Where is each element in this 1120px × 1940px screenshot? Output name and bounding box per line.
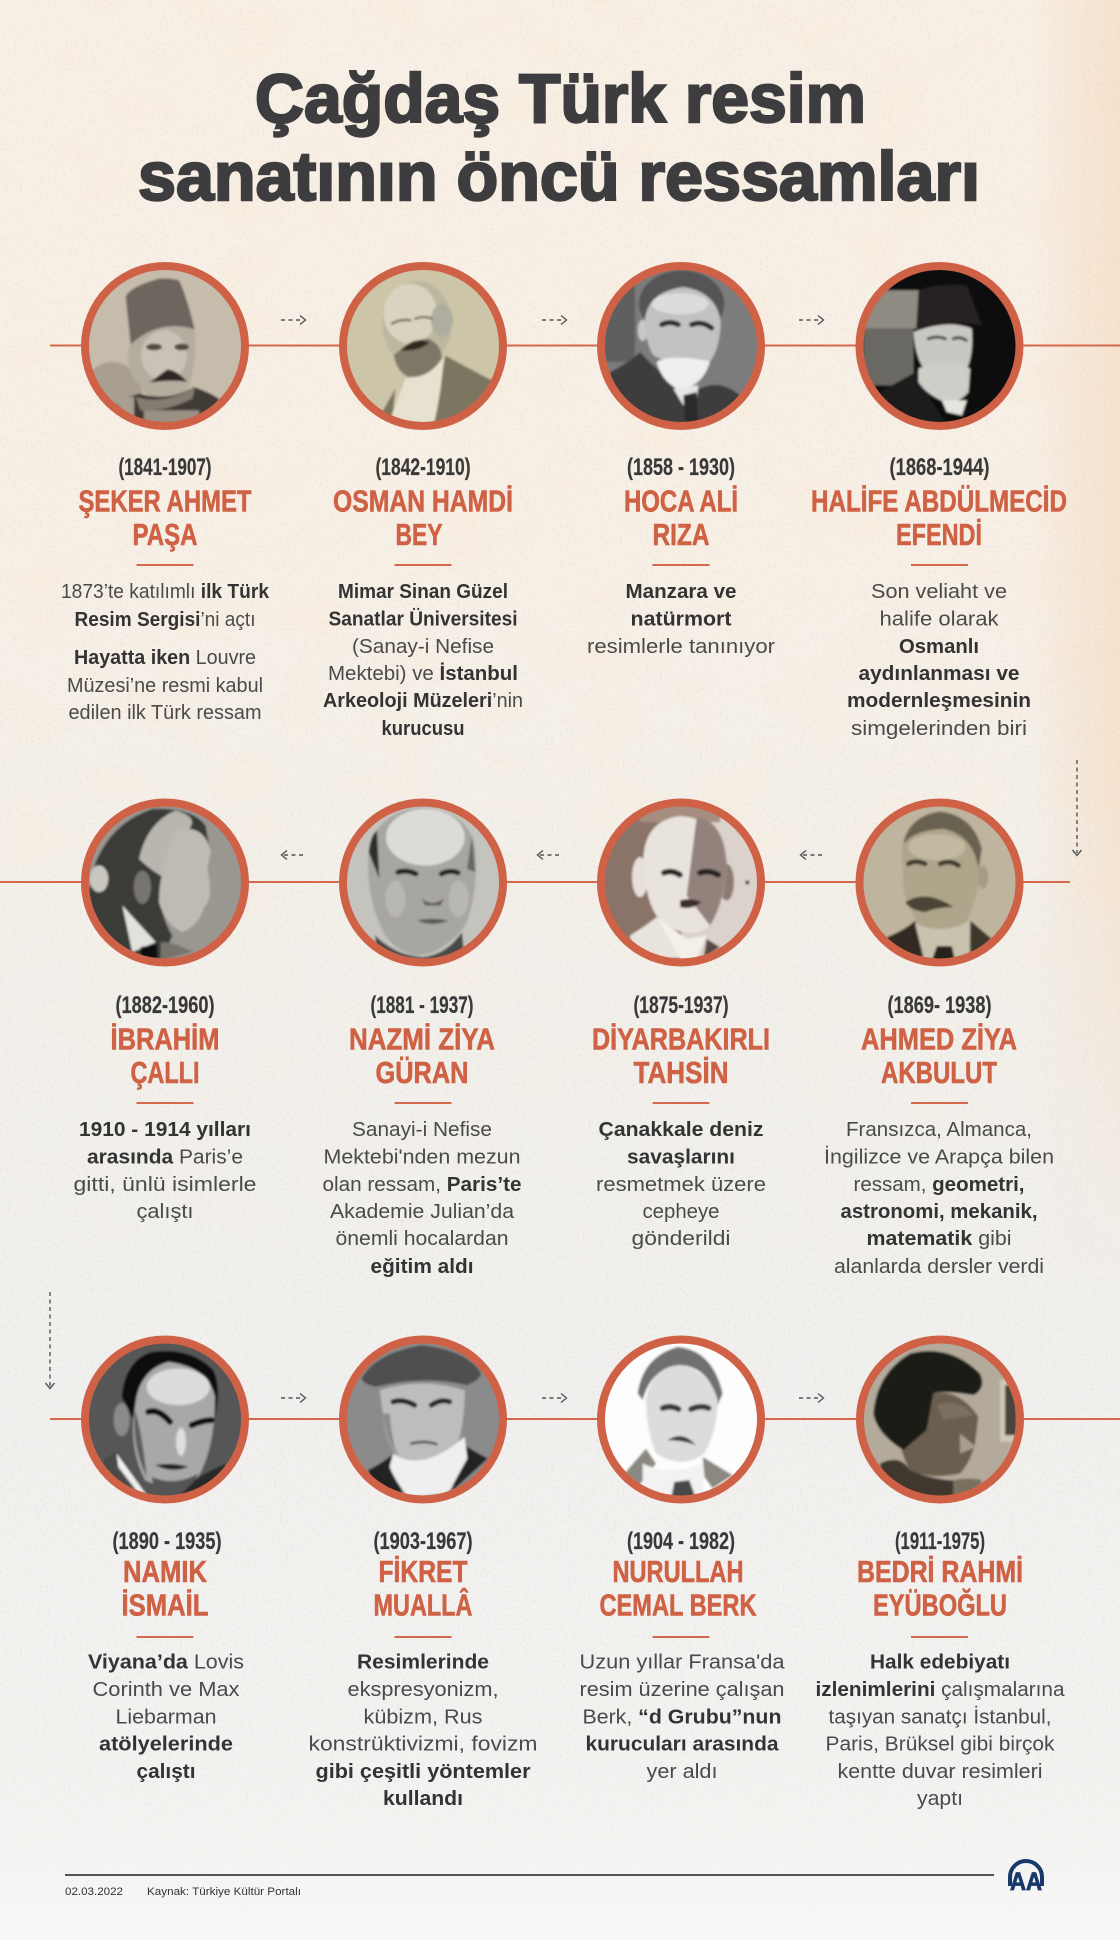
biography: kurucuları arasında [586,1734,779,1756]
biography: resmetmek üzere [596,1174,766,1196]
title: sanatının öncü ressamları [138,138,980,215]
biography: gibi çeşitli yöntemler [316,1761,531,1783]
biography [596,1119,766,1250]
name [600,1554,757,1622]
biography [322,1119,522,1278]
name: RIZA [652,517,710,552]
biography: Berk, “d Grubu”nun [582,1706,782,1728]
biography: konstrüktivizmi, fovizm [308,1734,538,1756]
name: İSMAİL [122,1588,208,1622]
portrait: Namık İsmail [82,1337,248,1503]
biography: atölyelerinde [99,1734,233,1756]
dates: (1903-1967) [374,1528,472,1555]
name: İBRAHİM [110,1022,220,1056]
divider [136,564,194,566]
biography: Müzesi’ne resmi kabul [67,675,263,697]
biography: Akademie Julian’da [330,1201,515,1223]
biography [816,1652,1065,1810]
biography: aydınlanması ve [858,663,1020,685]
biography: 1910 - 1914 yılları [79,1119,251,1141]
dates: (1882-1960) [116,992,214,1019]
biography: Mimar Sinan Güzel [338,581,508,603]
panel: Şeker Ahmet Paşa [61,262,270,724]
name: BEDRİ RAHMİ [857,1554,1023,1589]
biography: kentte duvar resimleri [838,1761,1042,1783]
biography: ressam, geometri, [854,1174,1024,1196]
flow arrows [46,316,1082,1402]
name: AKBULUT [881,1055,997,1090]
name: BEY [396,517,443,552]
dates: (1875-1937) [634,992,728,1019]
biography [587,581,775,658]
dates: (1869- 1938) [888,992,992,1019]
panel: Nurullah Cemal Berk [580,1337,785,1783]
portrait: Osman Hamdi Bey [340,262,507,429]
biography: matematik gibi [866,1228,1012,1250]
biography: izlenimlerini çalışmalarına [816,1679,1065,1701]
dates: (1842-1910) [376,454,470,481]
divider [911,1636,968,1638]
portrait: Nurullah Cemal Berk [598,1337,764,1503]
biography [824,1119,1054,1278]
divider [394,1636,452,1638]
name: TAHSİN [634,1055,728,1090]
biography: Son veliaht ve [871,581,1007,603]
name: CEMAL BERK [600,1588,757,1622]
divider [652,564,710,566]
name [349,1022,495,1090]
biography: Mektebi) ve İstanbul [328,662,518,685]
biography [308,1652,538,1810]
biography: edilen ilk Türk ressam [68,702,262,724]
name: EYÜBOĞLU [873,1588,1007,1622]
name [122,1554,208,1622]
biography [323,581,523,740]
name [333,484,513,552]
biography: eğitim aldı [370,1256,474,1278]
biography: Sanatlar Üniversitesi [328,608,518,630]
name [861,1022,1017,1090]
dates: (1911-1975) [895,1528,985,1555]
biography: olan ressam, Paris’te [322,1174,522,1196]
biography: Liebarman [116,1706,216,1728]
name [857,1554,1023,1622]
biography: modernleşmesinin [847,690,1031,712]
name [110,1022,220,1090]
biography: Corinth ve Max [92,1679,240,1701]
divider [911,564,968,566]
panel: Namık İsmail [82,1337,248,1783]
biography: Fransızca, Almanca, [846,1119,1032,1141]
biography: Hayatta iken Louvre [74,647,256,669]
dates: (1881 - 1937) [370,992,474,1019]
name: HOCA ALİ [624,484,738,518]
dates: (1858 - 1930) [627,454,735,481]
timeline rows [0,346,1120,1419]
biography: resimlerle tanınıyor [587,636,775,658]
biography: yaptı [917,1788,963,1810]
biography [847,581,1031,740]
biography [74,1119,256,1223]
biography: Halk edebiyatı [870,1652,1010,1674]
panel: Bedri Rahmi Eyüboğlu [816,1337,1065,1810]
portrait: Nazmi Ziya Güran [340,799,507,965]
biography: kurucusu [382,718,464,740]
biography: alanlarda dersler verdi [834,1256,1044,1278]
biography [88,1652,244,1783]
biography: Arkeoloji Müzeleri’nin [323,690,523,712]
panel: Nazmi Ziya Güran [322,799,522,1278]
dates: (1890 - 1935) [112,1528,222,1555]
biography [580,1652,785,1783]
biography: 1873’te katılımlı ilk Türk [61,581,270,603]
portrait: Bedri Rahmi Eyüboğlu [857,1337,1023,1503]
dates: (1868-1944) [890,454,990,481]
source: Kaynak: Türkiye Kültür Portalı [147,1886,301,1898]
biography: taşıyan sanatçı İstanbul, [828,1706,1052,1728]
biography: önemli hocalardan [336,1228,508,1250]
biography: Çanakkale deniz [598,1119,764,1141]
biography: çalıştı [136,1201,194,1223]
biography: gönderildi [632,1228,730,1250]
portrait: Fikret Mualla [340,1337,506,1503]
biography: İngilizce ve Arapça bilen [824,1146,1054,1168]
portrait: Hoca Ali Rıza [598,262,765,429]
biography: Viyana’da Lovis [88,1652,244,1674]
dates: (1904 - 1982) [627,1528,735,1555]
panel: Ahmed Ziya Akbulut [824,799,1054,1278]
name: NAMIK [123,1554,207,1589]
biography: ekspresyonizm, [348,1679,498,1701]
portrait: Şeker Ahmet Paşa [82,262,249,429]
biography [61,581,270,724]
divider [652,1102,710,1104]
name: OSMAN HAMDİ [333,484,513,518]
biography: resim üzerine çalışan [580,1679,784,1701]
name: EFENDİ [896,517,982,552]
date: 02.03.2022 [65,1886,123,1898]
divider [911,1102,968,1104]
name: DİYARBAKIRLI [592,1022,770,1056]
name: MUALLÂ [374,1586,472,1622]
name [592,1022,770,1090]
name: NURULLAH [612,1554,744,1589]
biography: halife olarak [880,608,1000,630]
panel: Fikret Mualla [308,1337,538,1810]
biography: simgelerinden biri [851,718,1027,740]
name: ÇALLI [130,1055,200,1090]
biography: kullandı [383,1788,463,1810]
portrait: Ahmed Ziya Akbulut [857,799,1023,965]
biography: gitti, ünlü isimlerle [74,1174,256,1196]
biography: Sanayi-i Nefise [352,1119,492,1141]
divider [136,1102,194,1104]
biography: çalıştı [136,1761,196,1783]
dates: (1841-1907) [118,454,212,481]
footer [65,1861,1042,1898]
name [811,484,1067,552]
biography: Osmanlı [899,636,979,658]
name: NAZMİ ZİYA [349,1022,495,1056]
biography: natürmort [630,608,732,630]
divider [394,564,452,566]
biography: (Sanay-i Nefise [352,636,494,658]
panel: Halife Abdülmecid Efendi [811,262,1067,740]
name: FİKRET [378,1554,468,1589]
title: Çağdaş Türk resim [255,60,866,137]
portrait: Diyarbakırlı Tahsin [598,799,765,965]
biography: savaşlarını [627,1146,735,1168]
biography: kübizm, Rus [364,1706,482,1728]
logo: AA: AA [1010,1868,1042,1896]
biography: Mektebi'nden mezun [324,1146,520,1168]
name: ŞEKER AHMET [78,484,252,518]
biography: Paris, Brüksel gibi birçok [826,1734,1056,1756]
panel: İbrahim Çallı [74,799,256,1223]
biography: Uzun yıllar Fransa'da [580,1652,785,1674]
name: AHMED ZİYA [861,1022,1017,1056]
panel: Hoca Ali Rıza [587,262,775,658]
divider [394,1102,452,1104]
name: GÜRAN [376,1055,468,1090]
biography: Manzara ve [626,581,736,603]
biography: cepheye [642,1201,720,1223]
biography: Resimlerinde [357,1652,489,1674]
name [374,1554,472,1622]
portrait: Halife Abdülmecid Efendi [857,262,1023,429]
biography: astronomi, mekanik, [840,1201,1038,1223]
divider [136,1636,194,1638]
biography: Resim Sergisi’ni açtı [74,609,256,631]
divider [652,1636,710,1638]
biography: yer aldı [646,1761,718,1783]
portrait: İbrahim Çallı [82,799,249,965]
name: PAŞA [132,517,198,552]
biography: arasında Paris’e [87,1146,243,1168]
title [138,60,980,215]
panel: Osman Hamdi Bey [323,262,523,740]
panel: Diyarbakırlı Tahsin [592,799,770,1250]
name [78,484,252,552]
name [624,484,738,552]
